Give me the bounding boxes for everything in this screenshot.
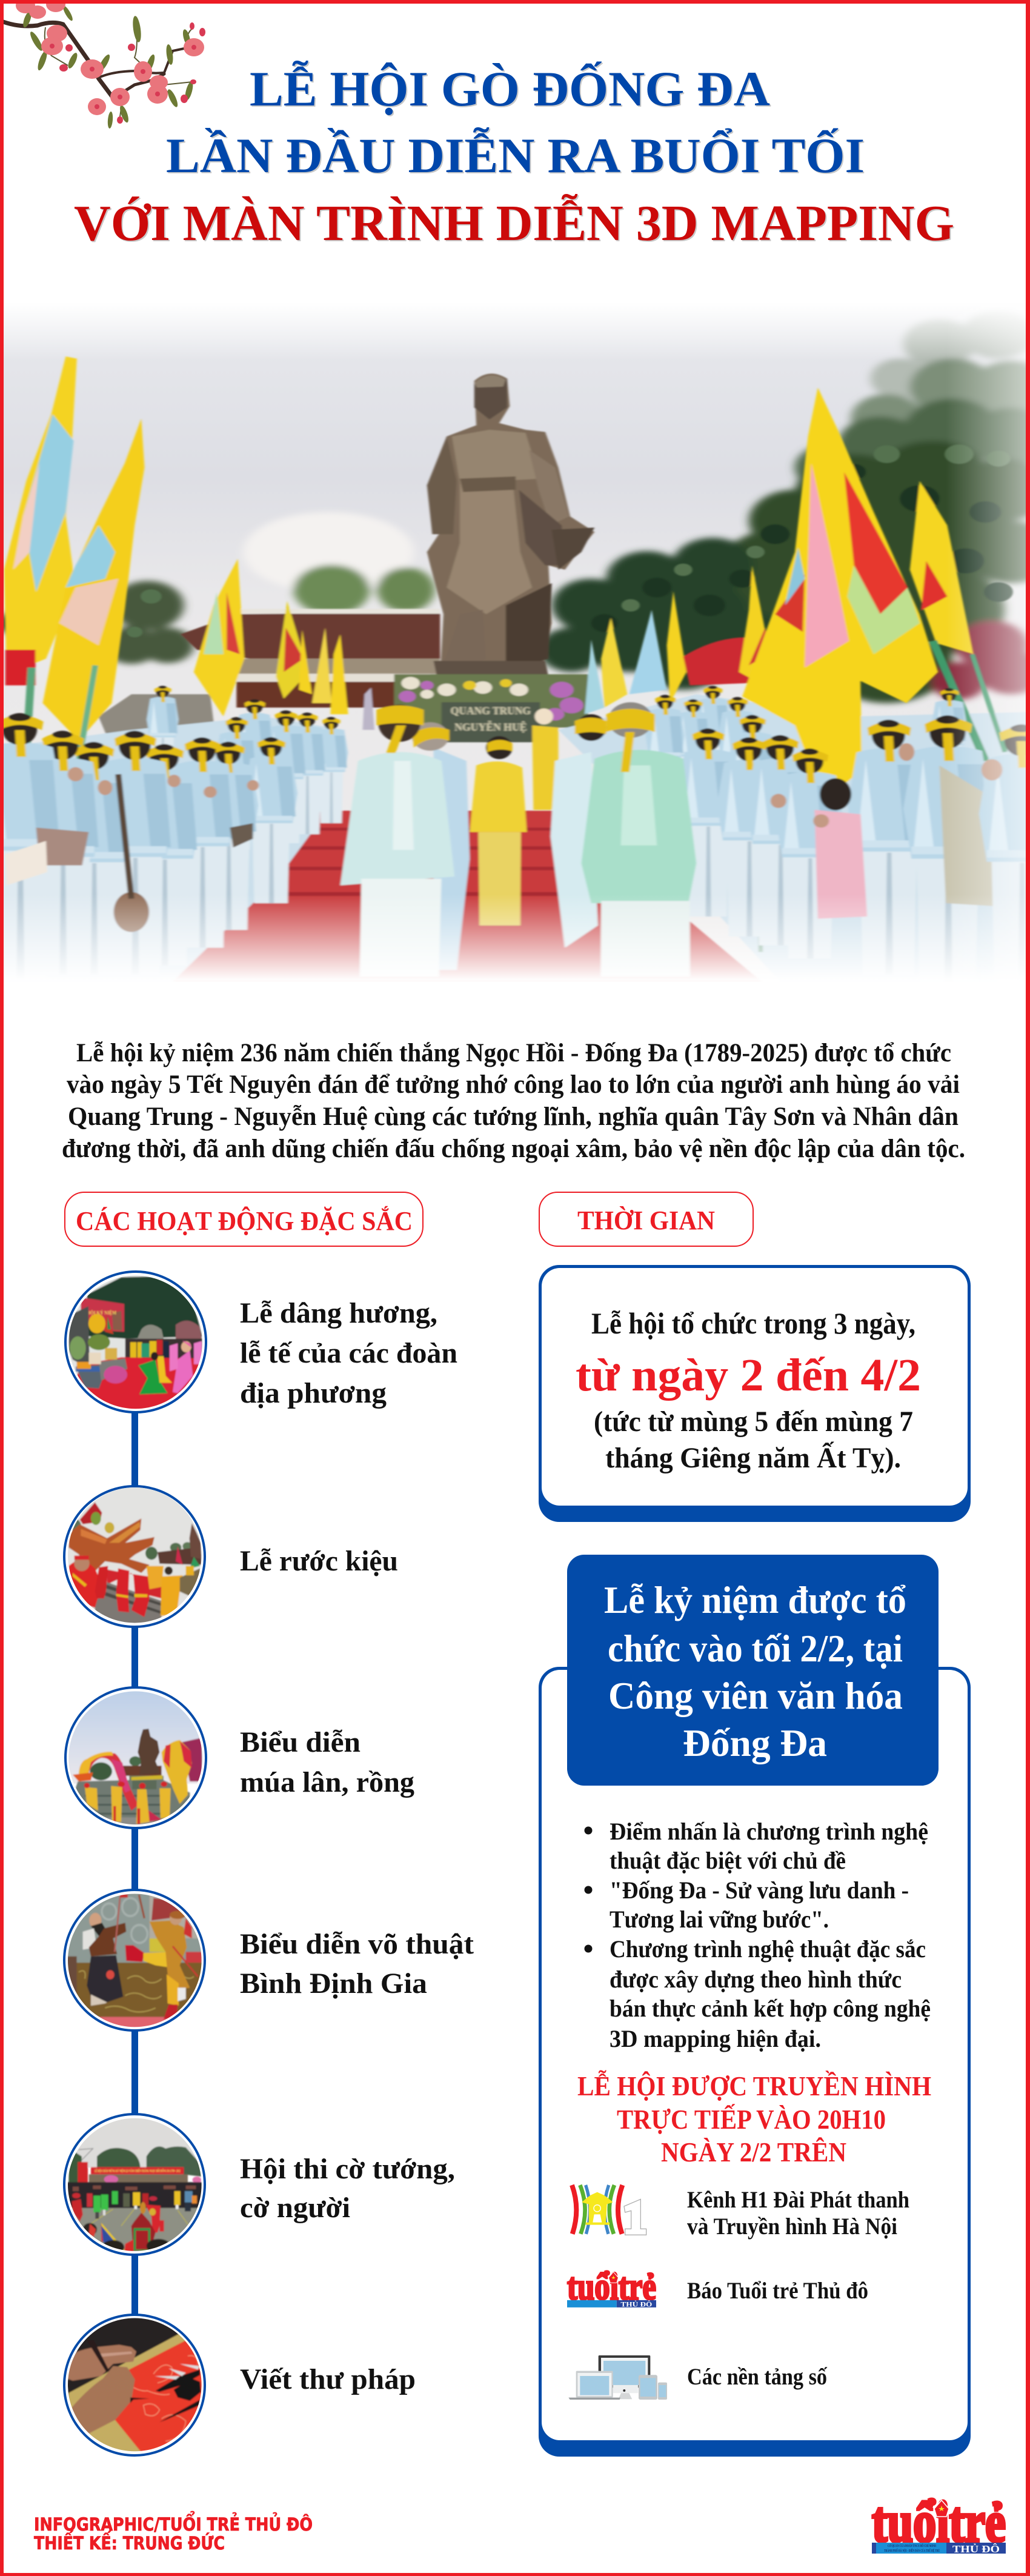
- bullet list: bán thực cảnh kết hợp công nghệ: [610, 1995, 931, 2022]
- flower bed and plaque: [394, 674, 588, 727]
- dates text: tháng Giêng năm Ất Tỵ).: [605, 1441, 901, 1474]
- activity 2: palanquin procession: [64, 1485, 205, 1627]
- bullet list: Tương lai vững bước".: [610, 1906, 829, 1933]
- outlet text: Báo Tuổi trẻ Thủ đô: [687, 2278, 868, 2304]
- bullet list: được xây dựng theo hình thức: [610, 1966, 902, 1993]
- channel H1 text: và Truyền hình Hà Nội: [687, 2214, 897, 2240]
- crowd base: [0, 716, 345, 983]
- activity 6: calligraphy: [64, 2315, 205, 2455]
- callout: anniversary location: Công viên văn hóa: [608, 1675, 903, 1717]
- hero fades: [0, 894, 1030, 981]
- icon: Tuoi Tre Thu Do logo small: tuổitrẻ: [567, 2265, 656, 2308]
- timeline connectors: [131, 1412, 138, 2315]
- centre figures: [341, 702, 696, 976]
- label: activity 3: [240, 1726, 414, 1798]
- crowd left: [0, 686, 348, 979]
- label: activity 6: Viết thư pháp: [240, 2363, 416, 2395]
- label: activity 4: Biểu diễn võ thuật: [240, 1928, 474, 1960]
- activity 5: human chess: LỄ HỘI CHÀO MỪNG KỶ NIỆM 223 NĂM CHIẾN THẮNG NGỌC HỒI ĐỐNG ĐA 1789 - 2012: [95, 2168, 181, 2174]
- label: activity 5: cờ người: [240, 2192, 350, 2224]
- callout: anniversary location: chức vào tối 2/2, tại: [608, 1627, 903, 1670]
- foreground scene: [0, 356, 1030, 992]
- logo: Tuoi Tre Thu Do: THỦ ĐÔ: [952, 2543, 1000, 2555]
- label: activity 4: [240, 1928, 474, 2000]
- flags left: [4, 356, 374, 741]
- bullet list: 3D mapping hiện đại.: [610, 2025, 821, 2052]
- logo: Tuoi Tre Thu Do: THÀNH PHỐ HÀ NỘI - DIỄN ĐÀN CỦA THẾ HỆ TRẺ: [884, 2548, 940, 2553]
- broadcast heading: NGÀY 2/2 TRÊN: [661, 2137, 846, 2167]
- icon: blossom branch: [0, 0, 205, 128]
- intro paragraph: Lễ hội kỷ niệm 236 năm chiến thắng Ngọc Hồi - Đống Đa (1789-2025) được tổ chức: [76, 1039, 951, 1067]
- dates text: từ ngày 2 đến 4/2: [576, 1350, 921, 1401]
- temple building: [181, 612, 440, 659]
- logo: Tuoi Tre Thu Do: CƠ QUAN CỦA ĐOÀN TNCS HỒ CHÍ MINH: [888, 2543, 936, 2548]
- plaque text: NGUYỄN HUỆ: [454, 720, 527, 733]
- dates text: Lễ hội tổ chức trong 3 ngày,: [591, 1306, 915, 1340]
- digital platforms text: Các nền tảng số: [687, 2364, 827, 2390]
- bullet list: thuật đặc biệt với chủ đề: [610, 1847, 846, 1874]
- plaque text: QUANG TRUNG: [451, 705, 531, 716]
- intro paragraph: Quang Trung - Nguyễn Huệ cùng các tướng lĩnh, nghĩa quân Tây Sơn và Nhân dân: [68, 1103, 959, 1131]
- bullet list: "Đống Đa - Sử vàng lưu danh -: [610, 1877, 909, 1904]
- intro paragraph: vào ngày 5 Tết Nguyên đán để tưởng nhớ công lao to lớn của người anh hùng áo vải: [67, 1070, 960, 1099]
- channel H1 text: Kênh H1 Đài Phát thanh: [687, 2187, 909, 2213]
- bullet list: Điểm nhấn là chương trình nghệ: [610, 1818, 928, 1845]
- flags right: [25, 387, 1005, 952]
- label: activity 5: [240, 2153, 455, 2224]
- title: LỄ HỘI GÒ ĐỐNG ĐA: [250, 60, 770, 116]
- footer credits: THIẾT KẾ: TRUNG ĐỨC: [34, 2531, 225, 2554]
- broadcast heading: LỄ HỘI ĐƯỢC TRUYỀN HÌNH: [577, 2070, 931, 2101]
- crowd right: [646, 686, 1030, 992]
- label: activity 5: Hội thi cờ tướng,: [240, 2153, 455, 2185]
- broadcast heading: TRỰC TIẾP VÀO 20H10: [617, 2103, 886, 2135]
- heading pill: time: THỜI GIAN: [577, 1206, 715, 1235]
- panel: anniversary details: [539, 1667, 971, 2457]
- bullet list: [584, 1818, 931, 2052]
- label: activity 1: địa phương: [240, 1377, 387, 1409]
- bullet list: Chương trình nghệ thuật đặc sắc: [610, 1935, 926, 1963]
- panel: festival dates: [539, 1265, 971, 1522]
- label: activity 2: Lễ rước kiệu: [240, 1545, 398, 1577]
- callout: anniversary location: [567, 1555, 939, 1786]
- icon: digital devices: [568, 2355, 667, 2400]
- channel H1 text: [687, 2187, 909, 2240]
- statue: [427, 373, 594, 676]
- title: LẦN ĐẦU DIỄN RA BUỔI TỐI: [166, 127, 865, 183]
- heading pill: activities: CÁC HOẠT ĐỘNG ĐẶC SẮC: [76, 1206, 413, 1236]
- activity 1: incense offering: [65, 1272, 206, 1413]
- dates text: (tức từ mùng 5 đến mùng 7: [594, 1406, 913, 1438]
- heading pill: activities: [65, 1192, 423, 1246]
- title: [74, 60, 954, 252]
- label: activity 4: Bình Định Gia: [240, 1967, 427, 2000]
- intro paragraph: đương thời, đã anh dũng chiến đấu chống ngoại xâm, bảo vệ nền độc lập của dân tộc.: [62, 1135, 965, 1163]
- icon: H1 channel logo: [572, 2185, 646, 2235]
- activity 4: Binh Dinh martial arts: [64, 1890, 205, 2030]
- background foliage: [0, 310, 1030, 703]
- footer credits: INFOGRAPHIC/TUỔI TRẺ THỦ ĐÔ: [34, 2511, 313, 2535]
- callout: anniversary location: Đống Đa: [683, 1722, 827, 1764]
- red carpet stairs: [145, 811, 769, 987]
- hero photo: Quang Trung statue and festival crowd: [0, 302, 1030, 1003]
- callout: anniversary location: Lễ kỷ niệm được tổ: [604, 1579, 906, 1621]
- intro paragraph: [62, 1039, 965, 1163]
- activity 1: incense offering: HỘI KỶ NIỆM: [87, 1309, 117, 1316]
- icon: Tuoi Tre Thu Do logo small: THỦ ĐÔ: [620, 2301, 653, 2309]
- label: activity 1: lễ tế của các đoàn: [240, 1337, 457, 1369]
- foliage texture: [591, 464, 1013, 632]
- label: activity 1: Lễ dâng hương,: [240, 1297, 437, 1329]
- footer credits: [34, 2511, 313, 2554]
- activity 5: human chess: [64, 2114, 205, 2255]
- plaque text: [451, 705, 531, 733]
- activity 3: lion and dragon dance: [65, 1687, 206, 1828]
- label: activity 3: Biểu diễn: [240, 1726, 360, 1758]
- label: activity 1: [240, 1297, 457, 1409]
- title: VỚI MÀN TRÌNH DIỄN 3D MAPPING: [74, 193, 954, 252]
- heading pill: time: [539, 1192, 753, 1246]
- broadcast heading: [577, 2070, 931, 2167]
- dates text: [576, 1306, 921, 1474]
- label: activity 3: múa lân, rồng: [240, 1766, 414, 1798]
